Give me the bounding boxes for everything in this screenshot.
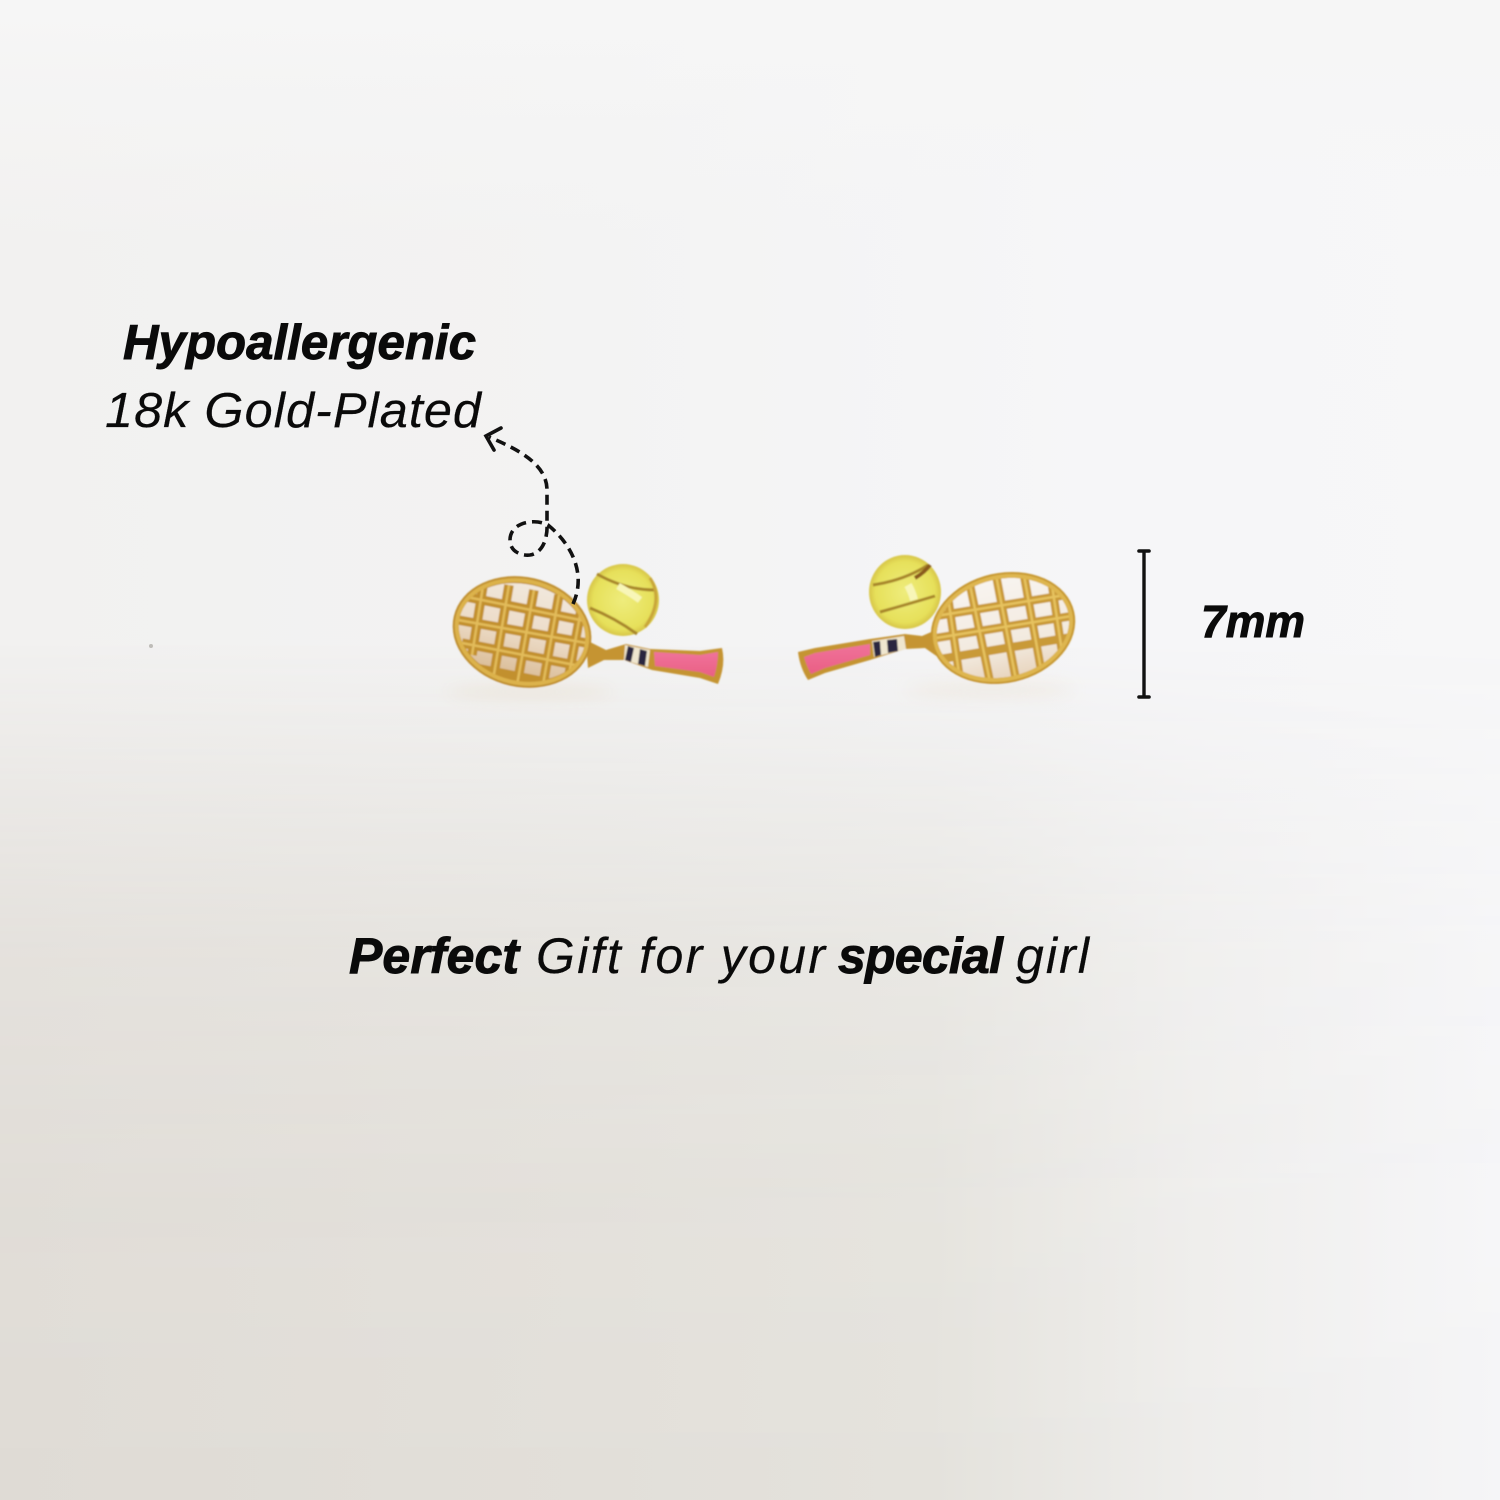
- left throat and handle: [586, 640, 723, 684]
- tagline: Gift for your: [536, 928, 827, 984]
- background: soft photo backdrop: [0, 712, 1200, 1500]
- earring: left tennis racket and ball: [441, 563, 723, 701]
- size indicator: vertical bracket: [1139, 551, 1149, 697]
- speck on backdrop: [149, 644, 153, 648]
- earring: right tennis racket and ball: [798, 555, 1087, 698]
- left racket head: [452, 575, 592, 689]
- tagline: Perfect: [349, 928, 521, 984]
- right tennis ball: [869, 555, 941, 629]
- left tennis ball: [587, 564, 659, 636]
- right racket head: [930, 570, 1076, 685]
- callout: 18k gold-plated: 18k Gold-Plated: [105, 384, 483, 438]
- right throat and handle: [798, 626, 945, 680]
- arrow: dashed looping arrow to the gold-plating label: [486, 428, 578, 604]
- callout: hypoallergenic: Hypoallergenic: [123, 316, 476, 370]
- size label: 7mm: [1201, 596, 1305, 647]
- tagline: girl: [1016, 928, 1091, 984]
- tagline: special: [838, 928, 1004, 984]
- product and annotation artwork: [106, 323, 1304, 984]
